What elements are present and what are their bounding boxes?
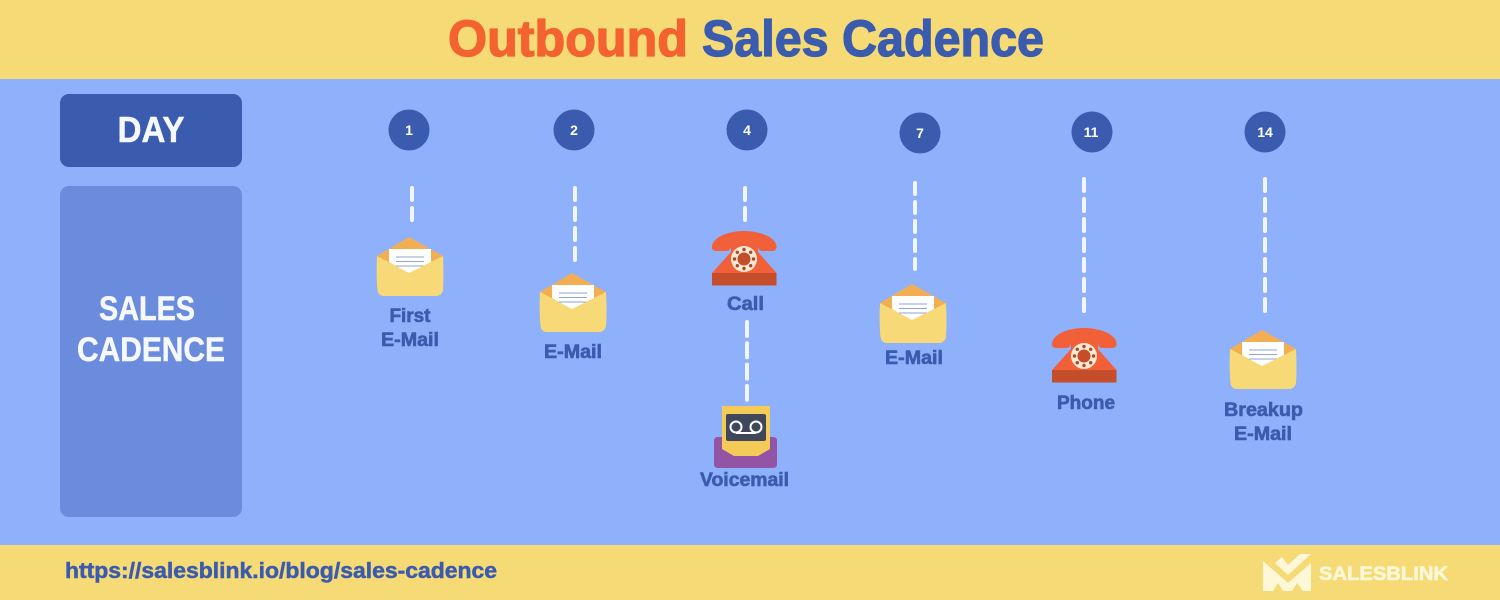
label: first e-mail (381, 306, 439, 351)
icon: envelope (540, 273, 606, 332)
footer band (0, 545, 1500, 600)
day badge 4: 4 (743, 122, 751, 138)
day badge 11 (1072, 112, 1112, 152)
icon: envelope (1230, 330, 1296, 389)
icon: envelope (880, 284, 946, 343)
icon: telephone (1052, 328, 1117, 382)
title: Sales Cadence (702, 10, 1044, 67)
label: breakup e-mail (1224, 400, 1303, 445)
column: day 4 call and voicemail (700, 110, 789, 491)
panel: sales cadence label: SALES (99, 290, 195, 328)
label: first e-mail: E-Mail (381, 330, 439, 351)
day badge 2: 2 (570, 122, 578, 138)
column: day 14 breakup e-mail (1224, 112, 1303, 445)
footer url: https://salesblink.io/blog/sales-cadence (65, 558, 497, 583)
title: Outbound (448, 10, 688, 67)
day badge 4 (726, 110, 768, 150)
label: e-mail: E-Mail (885, 348, 943, 369)
panel: sales cadence label: CADENCE (77, 331, 225, 369)
label: breakup e-mail: Breakup (1224, 400, 1303, 421)
label: phone: Phone (1057, 393, 1115, 414)
column: day 11 phone (1052, 112, 1117, 414)
icon: telephone (712, 231, 777, 286)
day badge 2 (554, 110, 594, 150)
logo wordmark: SALESBLINK (1319, 564, 1448, 585)
day badge 7: 7 (916, 125, 924, 141)
day badge 7 (900, 112, 940, 154)
day badge 14: 14 (1257, 124, 1273, 140)
header band (0, 0, 1500, 79)
day badge 1: 1 (405, 122, 413, 138)
panel: day label: DAY (118, 109, 184, 150)
panel: day label (60, 94, 242, 167)
column: day 2 e-mail (540, 110, 606, 363)
label: first e-mail: First (390, 306, 431, 327)
icon: voicemail (714, 406, 777, 468)
label: breakup e-mail: E-Mail (1234, 424, 1292, 445)
icon: logo mark (1263, 554, 1311, 591)
label: voicemail: Voicemail (700, 470, 789, 491)
icon: envelope (377, 237, 444, 296)
day badge 1 (388, 110, 430, 150)
label: e-mail: E-Mail (544, 342, 602, 363)
day badge 14 (1244, 112, 1286, 152)
label: call: Call (727, 294, 764, 315)
column: day 7 e-mail (880, 112, 946, 369)
title (448, 10, 1044, 67)
panel: sales cadence label (60, 186, 242, 517)
column: day 1 first e-mail (377, 110, 444, 351)
day badge 11: 11 (1084, 124, 1099, 140)
salesblink logo (1263, 554, 1448, 591)
